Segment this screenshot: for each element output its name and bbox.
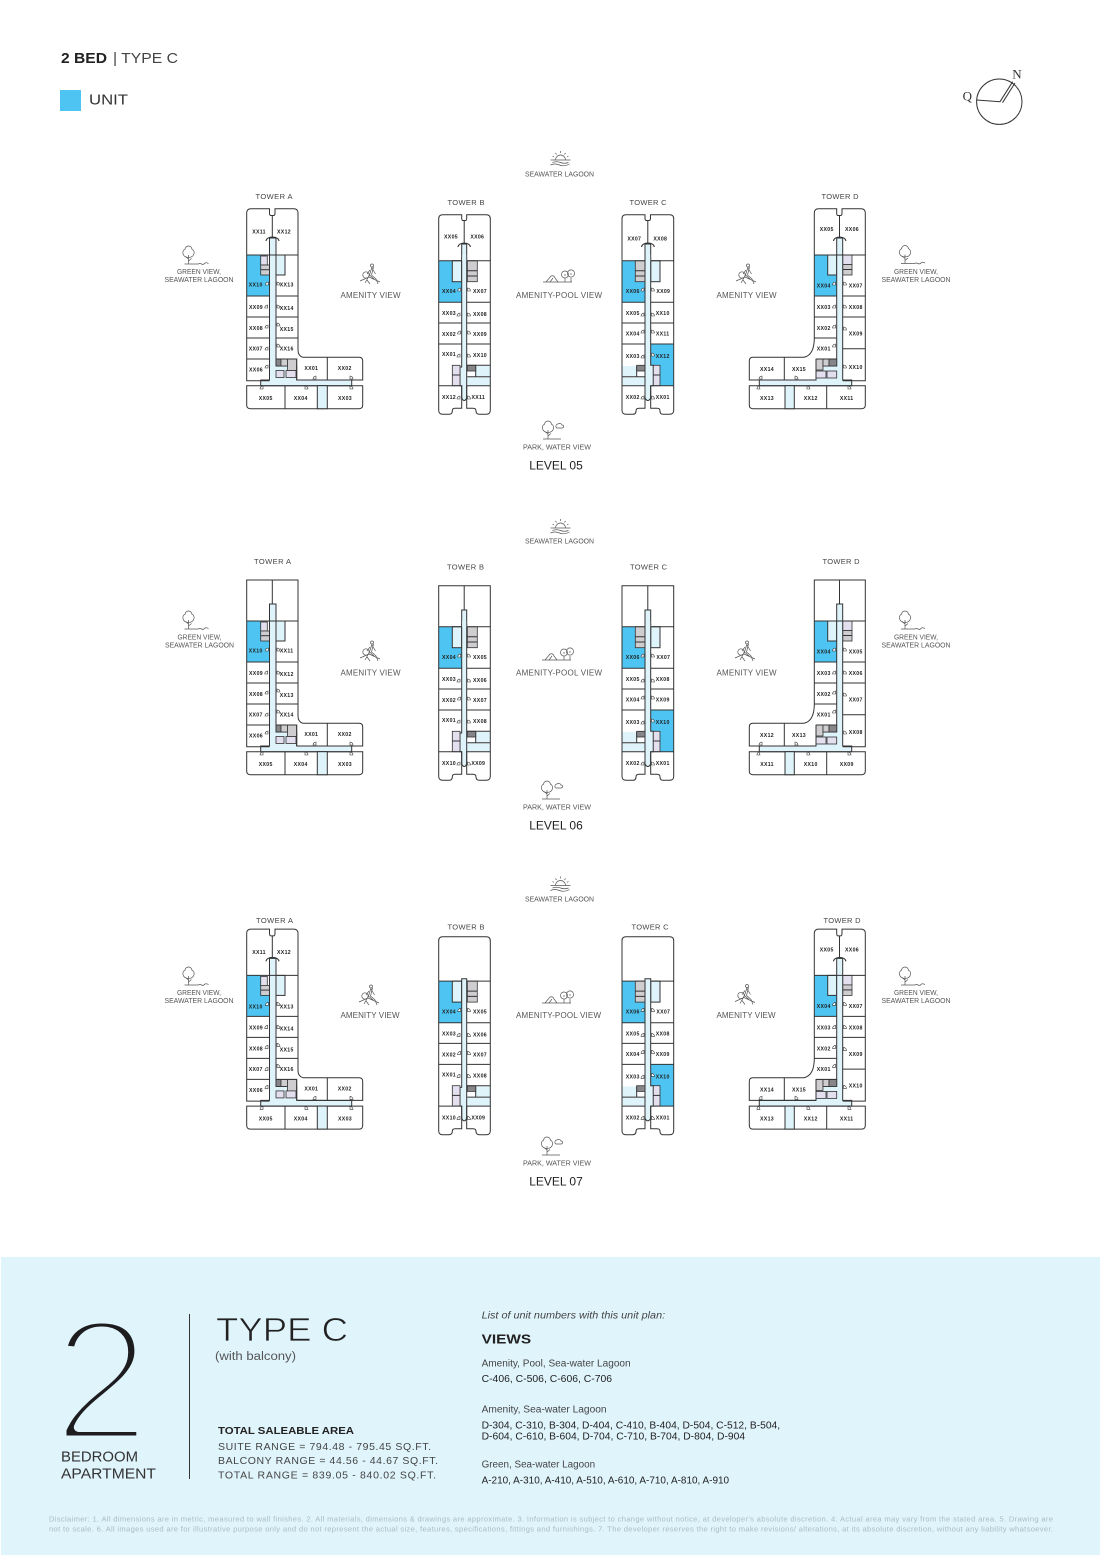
tower d: XX09 <box>849 1052 863 1058</box>
tower d: XX06 <box>845 227 859 233</box>
tower d: XX08 <box>849 1025 863 1031</box>
label: bedroom apartment: APARTMENT <box>61 1467 156 1483</box>
tower d: XX12 <box>760 733 774 739</box>
tower c: XX07 <box>627 236 641 242</box>
tower a: XX07 <box>249 1067 263 1073</box>
tower a: XX13 <box>280 1004 294 1010</box>
tower b: XX03 <box>442 1031 456 1037</box>
tower c: XX01 <box>656 395 670 401</box>
icon: park water view <box>541 781 562 799</box>
title: 2 bed type c: 2 BED <box>61 51 107 67</box>
tower b: XX09 <box>471 1115 485 1121</box>
icon: amenity view <box>360 264 380 284</box>
icon: seawater lagoon <box>550 519 570 534</box>
tower b: XX11 <box>471 395 485 401</box>
label: amenity view right: AMENITY VIEW <box>716 291 777 300</box>
tower c: XX03 <box>626 354 640 360</box>
tower d: XX13 <box>760 396 774 402</box>
text block: unit list: C-406, C-506, C-606, C-706 <box>482 1374 613 1385</box>
tower d: XX01 <box>817 346 831 352</box>
tower a: XX01 <box>304 1086 318 1092</box>
heading: level 05: LEVEL 05 <box>529 458 583 472</box>
icon: amenity pool view <box>542 648 574 660</box>
tower c: XX09 <box>656 289 670 295</box>
icon: amenity view <box>359 985 379 1005</box>
tower a: XX16 <box>280 346 294 352</box>
label: amenity pool view: AMENITY-POOL VIEW <box>516 1011 601 1020</box>
title: 2 bed type c <box>61 51 178 67</box>
label: green view left <box>164 269 234 284</box>
tower c <box>622 562 674 780</box>
label: green view right: GREEN VIEW, <box>894 634 938 642</box>
text block: total saleable area: BALCONY RANGE = 44.56 - 44.67 SQ.FT. <box>218 1455 438 1467</box>
text block: unit list: Green, Sea-water Lagoon <box>482 1459 595 1470</box>
heading: level 07: LEVEL 07 <box>529 1174 583 1188</box>
icon: park water view <box>541 1137 562 1155</box>
tower b: XX04 <box>442 1009 456 1015</box>
tower c: XX05 <box>626 677 640 683</box>
icon: amenity pool view <box>543 270 575 282</box>
tower c: TOWER C <box>630 198 667 207</box>
label: park water view: PARK, WATER VIEW <box>523 444 591 452</box>
tower c: XX08 <box>656 677 670 683</box>
subheading: with balcony: (with balcony) <box>215 1351 296 1363</box>
panel: level 05 <box>164 151 950 472</box>
tower b: XX03 <box>442 311 456 317</box>
tower a: XX08 <box>249 1046 263 1052</box>
tower b: XX08 <box>473 1073 487 1079</box>
tower b: TOWER B <box>447 562 484 572</box>
label: green view left: SEAWATER LAGOON <box>164 277 234 284</box>
icon: compass: Q <box>963 88 973 104</box>
tower d: XX04 <box>817 650 831 656</box>
tower d: XX09 <box>840 762 854 768</box>
tower c: XX04 <box>626 698 640 704</box>
icon: green view right <box>899 246 925 264</box>
tower b: XX07 <box>473 1052 487 1058</box>
tower c: XX07 <box>656 1009 670 1015</box>
icon: amenity view right <box>736 264 756 284</box>
tower b: XX06 <box>470 234 484 240</box>
text block: unit list: VIEWS <box>482 1332 531 1346</box>
tower a: XX11 <box>252 950 266 956</box>
tower a <box>247 557 363 775</box>
tower d: XX15 <box>792 367 806 373</box>
tower a: XX15 <box>280 1047 294 1053</box>
icon: park water view <box>542 421 564 439</box>
tower b: XX02 <box>442 698 456 704</box>
text block: total saleable area: TOTAL RANGE = 839.05 - 840.02 SQ.FT. <box>218 1469 436 1481</box>
text block: unit list: Amenity, Sea-water Lagoon <box>482 1404 607 1415</box>
label: amenity view right: AMENITY VIEW <box>716 668 777 677</box>
tower d <box>749 192 865 409</box>
icon: seawater lagoon <box>550 151 570 166</box>
tower d: XX03 <box>817 305 831 311</box>
tower d: XX02 <box>817 326 831 332</box>
tower b: TOWER B <box>448 198 484 207</box>
tower c: XX11 <box>656 332 670 338</box>
tower d: XX03 <box>817 1025 831 1031</box>
label: bedroom apartment <box>61 1450 156 1483</box>
tower b: XX01 <box>442 718 456 724</box>
tower d: XX05 <box>820 947 834 953</box>
tower b: XX07 <box>473 289 487 295</box>
label: green view left: SEAWATER LAGOON <box>165 642 234 650</box>
tower c: XX03 <box>626 1074 640 1080</box>
tower c: XX09 <box>656 698 670 704</box>
tower d: XX14 <box>760 367 774 373</box>
tower b: XX01 <box>442 1072 456 1078</box>
tower a: XX08 <box>249 692 263 698</box>
text block: total saleable area: SUITE RANGE = 794.48 - 795.45 SQ.FT. <box>218 1441 431 1453</box>
tower a: XX05 <box>259 762 273 768</box>
tower d: XX06 <box>849 671 863 677</box>
tower c: XX02 <box>626 761 640 767</box>
tower b: TOWER B <box>448 922 484 932</box>
tower a: XX02 <box>338 732 352 738</box>
tower c: XX10 <box>656 720 670 726</box>
tower a: XX03 <box>338 1116 352 1122</box>
legend: unit colour key: UNIT <box>89 92 128 108</box>
tower b: XX07 <box>473 698 487 704</box>
tower d: XX04 <box>817 1004 831 1010</box>
tower a: XX06 <box>249 368 263 374</box>
tower c: XX01 <box>656 761 670 767</box>
label: amenity view: AMENITY VIEW <box>340 1011 400 1020</box>
icon: seawater lagoon <box>550 876 570 891</box>
tower d: XX12 <box>804 396 818 402</box>
label: bedroom apartment: BEDROOM <box>61 1450 138 1466</box>
tower a: XX10 <box>249 1004 263 1010</box>
tower a: XX04 <box>294 396 308 402</box>
tower a: XX07 <box>249 346 263 352</box>
tower a: XX14 <box>280 1026 294 1032</box>
tower d: XX10 <box>804 762 818 768</box>
tower d: XX06 <box>845 947 859 953</box>
label: green view right: SEAWATER LAGOON <box>882 642 950 650</box>
label: green view right: GREEN VIEW, <box>894 269 938 276</box>
label: green view left <box>165 634 234 650</box>
tower d: XX10 <box>849 1083 863 1089</box>
label: seawater lagoon: SEAWATER LAGOON <box>525 538 594 546</box>
label: green view right <box>882 990 950 1005</box>
tower c: XX08 <box>656 1031 670 1037</box>
tower c: XX03 <box>626 720 640 726</box>
label: amenity view right: AMENITY VIEW <box>716 1011 776 1020</box>
panel: level 07 <box>164 876 950 1188</box>
tower b: XX02 <box>442 1052 456 1058</box>
icon: compass: N <box>1012 66 1022 82</box>
tower a: XX09 <box>249 305 263 311</box>
tower b: XX01 <box>442 352 456 358</box>
tower c: XX07 <box>656 655 670 661</box>
panel: level 06 <box>165 519 950 832</box>
text block: unit list: D-604, C-610, B-604, D-704, C-710, B-704, D-804, D-904 <box>482 1432 746 1443</box>
tower a: XX12 <box>277 230 291 236</box>
label: amenity view: AMENITY VIEW <box>340 291 401 300</box>
tower c: XX10 <box>656 311 670 317</box>
tower a <box>247 192 363 409</box>
tower a: XX14 <box>280 712 294 718</box>
tower c: XX01 <box>656 1115 670 1121</box>
tower b: XX10 <box>442 1115 456 1121</box>
tower c: XX02 <box>626 395 640 401</box>
label: amenity view: AMENITY VIEW <box>340 668 401 677</box>
icon: green view right <box>899 611 925 629</box>
tower a: XX04 <box>294 762 308 768</box>
tower d: XX11 <box>840 396 854 402</box>
tower a: XX11 <box>280 648 294 654</box>
tower d: XX12 <box>804 1116 818 1122</box>
tower a: XX03 <box>338 762 352 768</box>
tower d: XX05 <box>849 650 863 656</box>
icon: green view left <box>183 967 208 985</box>
label: green view left: GREEN VIEW, <box>177 269 221 276</box>
tower a: XX06 <box>249 734 263 740</box>
tower d: TOWER D <box>824 916 861 925</box>
tower a: XX01 <box>304 732 318 738</box>
tower d: XX15 <box>792 1087 806 1093</box>
tower d: XX07 <box>849 1004 863 1010</box>
tower b <box>439 198 490 414</box>
label: green view right: GREEN VIEW, <box>894 990 938 997</box>
icon: amenity view right <box>735 984 755 1004</box>
icon: amenity pool view <box>542 991 574 1003</box>
tower c: TOWER C <box>630 562 668 572</box>
tower b: XX06 <box>473 1032 487 1038</box>
icon: green view left <box>183 611 208 629</box>
icon: green view left <box>183 246 208 264</box>
tower a: XX05 <box>259 1116 273 1122</box>
text block: unit list: A-210, A-310, A-410, A-510, A-610, A-710, A-810, A-910 <box>482 1475 730 1486</box>
tower a: XX02 <box>338 1086 352 1092</box>
label: seawater lagoon: SEAWATER LAGOON <box>525 896 594 904</box>
label: green view left <box>164 990 234 1005</box>
tower d: XX08 <box>849 305 863 311</box>
tower a: XX11 <box>252 230 266 236</box>
tower d: XX11 <box>760 762 774 768</box>
tower a: XX07 <box>249 712 263 718</box>
tower d: XX02 <box>817 1046 831 1052</box>
tower d: XX05 <box>820 227 834 233</box>
tower a: XX10 <box>249 648 263 654</box>
tower a: XX06 <box>249 1088 263 1094</box>
tower c: XX10 <box>656 1074 670 1080</box>
tower c: XX05 <box>626 311 640 317</box>
tower a: XX02 <box>338 366 352 372</box>
icon: compass <box>963 66 1022 124</box>
text block: unit list: List of unit numbers with this unit plan: <box>482 1310 665 1322</box>
tower a: XX13 <box>280 282 294 288</box>
tower b: XX04 <box>442 655 456 661</box>
tower c: XX02 <box>626 1115 640 1121</box>
tower b: XX09 <box>471 761 485 767</box>
tower a: TOWER A <box>256 192 292 201</box>
tower a: XX03 <box>338 396 352 402</box>
tower b: XX02 <box>442 332 456 338</box>
numeral: 2: 2 <box>53 1282 150 1477</box>
text block: unit list <box>482 1310 780 1486</box>
tower a: TOWER A <box>256 916 293 925</box>
tower d: XX09 <box>849 332 863 338</box>
tower c <box>622 922 674 1135</box>
tower b: XX03 <box>442 677 456 683</box>
tower b <box>439 922 490 1135</box>
label: green view right <box>882 269 950 284</box>
legend: unit colour key <box>60 90 128 111</box>
tower a: XX09 <box>249 1025 263 1031</box>
tower c: XX05 <box>626 1031 640 1037</box>
tower a: XX13 <box>280 693 294 699</box>
tower c: XX04 <box>626 332 640 338</box>
tower c: XX08 <box>653 236 667 242</box>
icon: green view right <box>899 967 925 985</box>
tower c: XX04 <box>626 1052 640 1058</box>
label: seawater lagoon: SEAWATER LAGOON <box>525 172 594 178</box>
tower a: TOWER A <box>254 557 291 566</box>
tower b: XX09 <box>473 332 487 338</box>
tower d: XX11 <box>840 1116 854 1122</box>
tower d <box>749 557 865 775</box>
tower c: XX12 <box>656 354 670 360</box>
tower b: XX04 <box>442 289 456 295</box>
tower b: XX08 <box>473 719 487 725</box>
tower d <box>749 916 865 1129</box>
tower b: XX08 <box>473 312 487 318</box>
label: park water view: PARK, WATER VIEW <box>523 1160 591 1168</box>
tower b: XX05 <box>444 234 458 240</box>
tower b: XX05 <box>473 1009 487 1015</box>
tower a: XX08 <box>249 326 263 332</box>
heading: level 06: LEVEL 06 <box>529 818 583 832</box>
text block: unit list: D-304, C-310, B-304, D-404, C-410, B-404, D-504, C-512, B-504, <box>482 1420 780 1431</box>
label: amenity pool view: AMENITY-POOL VIEW <box>516 291 602 300</box>
tower a: XX12 <box>277 950 291 956</box>
tower c: XX09 <box>656 1052 670 1058</box>
tower a: XX10 <box>249 282 263 288</box>
tower d: TOWER D <box>822 557 860 566</box>
text block: disclaimer: not to scale. 6. All images used are for illustrative purpose only and do not represent the actual size, features, specifications, fittings and furnishings. 7. The developer reserves the right to make revisions/ alterations, at its absolute discretion, without any liability whatsoever. <box>49 1524 1053 1533</box>
tower c: XX06 <box>626 1009 640 1015</box>
tower d: TOWER D <box>822 192 859 201</box>
tower c: TOWER C <box>632 922 669 932</box>
tower b: XX05 <box>473 655 487 661</box>
tower a: XX05 <box>259 396 273 402</box>
tower b: XX10 <box>442 761 456 767</box>
tower d: XX14 <box>760 1087 774 1093</box>
text block: disclaimer <box>49 1515 1053 1533</box>
icon: amenity view right <box>735 641 755 661</box>
tower d: XX01 <box>817 712 831 718</box>
tower a: XX01 <box>304 366 318 372</box>
tower b: XX10 <box>473 353 487 359</box>
text block: unit list: Amenity, Pool, Sea-water Lagoon <box>482 1358 631 1370</box>
label: green view left: SEAWATER LAGOON <box>164 998 234 1005</box>
tower a: XX15 <box>280 327 294 333</box>
tower a: XX09 <box>249 671 263 677</box>
tower c <box>622 198 674 414</box>
tower d: XX03 <box>817 671 831 677</box>
tower d: XX04 <box>817 284 831 290</box>
icon: amenity view <box>360 641 380 661</box>
tower a: XX12 <box>280 672 294 678</box>
tower d: XX10 <box>849 365 863 371</box>
tower b: XX06 <box>473 678 487 684</box>
tower d: XX01 <box>817 1067 831 1073</box>
label: green view left: GREEN VIEW, <box>177 990 221 997</box>
text block: total saleable area <box>218 1425 438 1481</box>
tower d: XX07 <box>849 284 863 290</box>
title: 2 bed type c: | TYPE C <box>113 51 178 67</box>
tower a: XX04 <box>294 1116 308 1122</box>
tower b: XX12 <box>442 395 456 401</box>
label: green view right <box>882 634 950 650</box>
text block: disclaimer: Disclaimer: 1. All dimensions are in metric, measured to wall finishes. 2. All materials, dimensions & drawings are approximate. 3. Information is subject to change without notice, at developer's absolute discretion. 4. Actual area may vary from the stated area. 5. Drawing are <box>49 1515 1053 1524</box>
label: green view right: SEAWATER LAGOON <box>882 277 950 284</box>
label: park water view: PARK, WATER VIEW <box>523 804 591 812</box>
tower a: XX16 <box>280 1067 294 1073</box>
tower d: XX07 <box>849 698 863 704</box>
tower a: XX14 <box>280 306 294 312</box>
heading: type c: TYPE C <box>216 1311 348 1348</box>
label: green view right: SEAWATER LAGOON <box>882 998 950 1005</box>
tower c: XX06 <box>626 289 640 295</box>
tower d: XX08 <box>849 730 863 736</box>
text block: total saleable area: TOTAL SALEABLE AREA <box>218 1425 354 1437</box>
tower d: XX13 <box>760 1116 774 1122</box>
tower d: XX02 <box>817 692 831 698</box>
tower c: XX06 <box>626 655 640 661</box>
panel: unit information <box>1 1257 1100 1555</box>
label: green view left: GREEN VIEW, <box>178 634 222 642</box>
tower b <box>439 562 490 780</box>
tower d: XX13 <box>792 733 806 739</box>
tower a <box>247 916 363 1129</box>
label: amenity pool view: AMENITY-POOL VIEW <box>516 668 602 677</box>
